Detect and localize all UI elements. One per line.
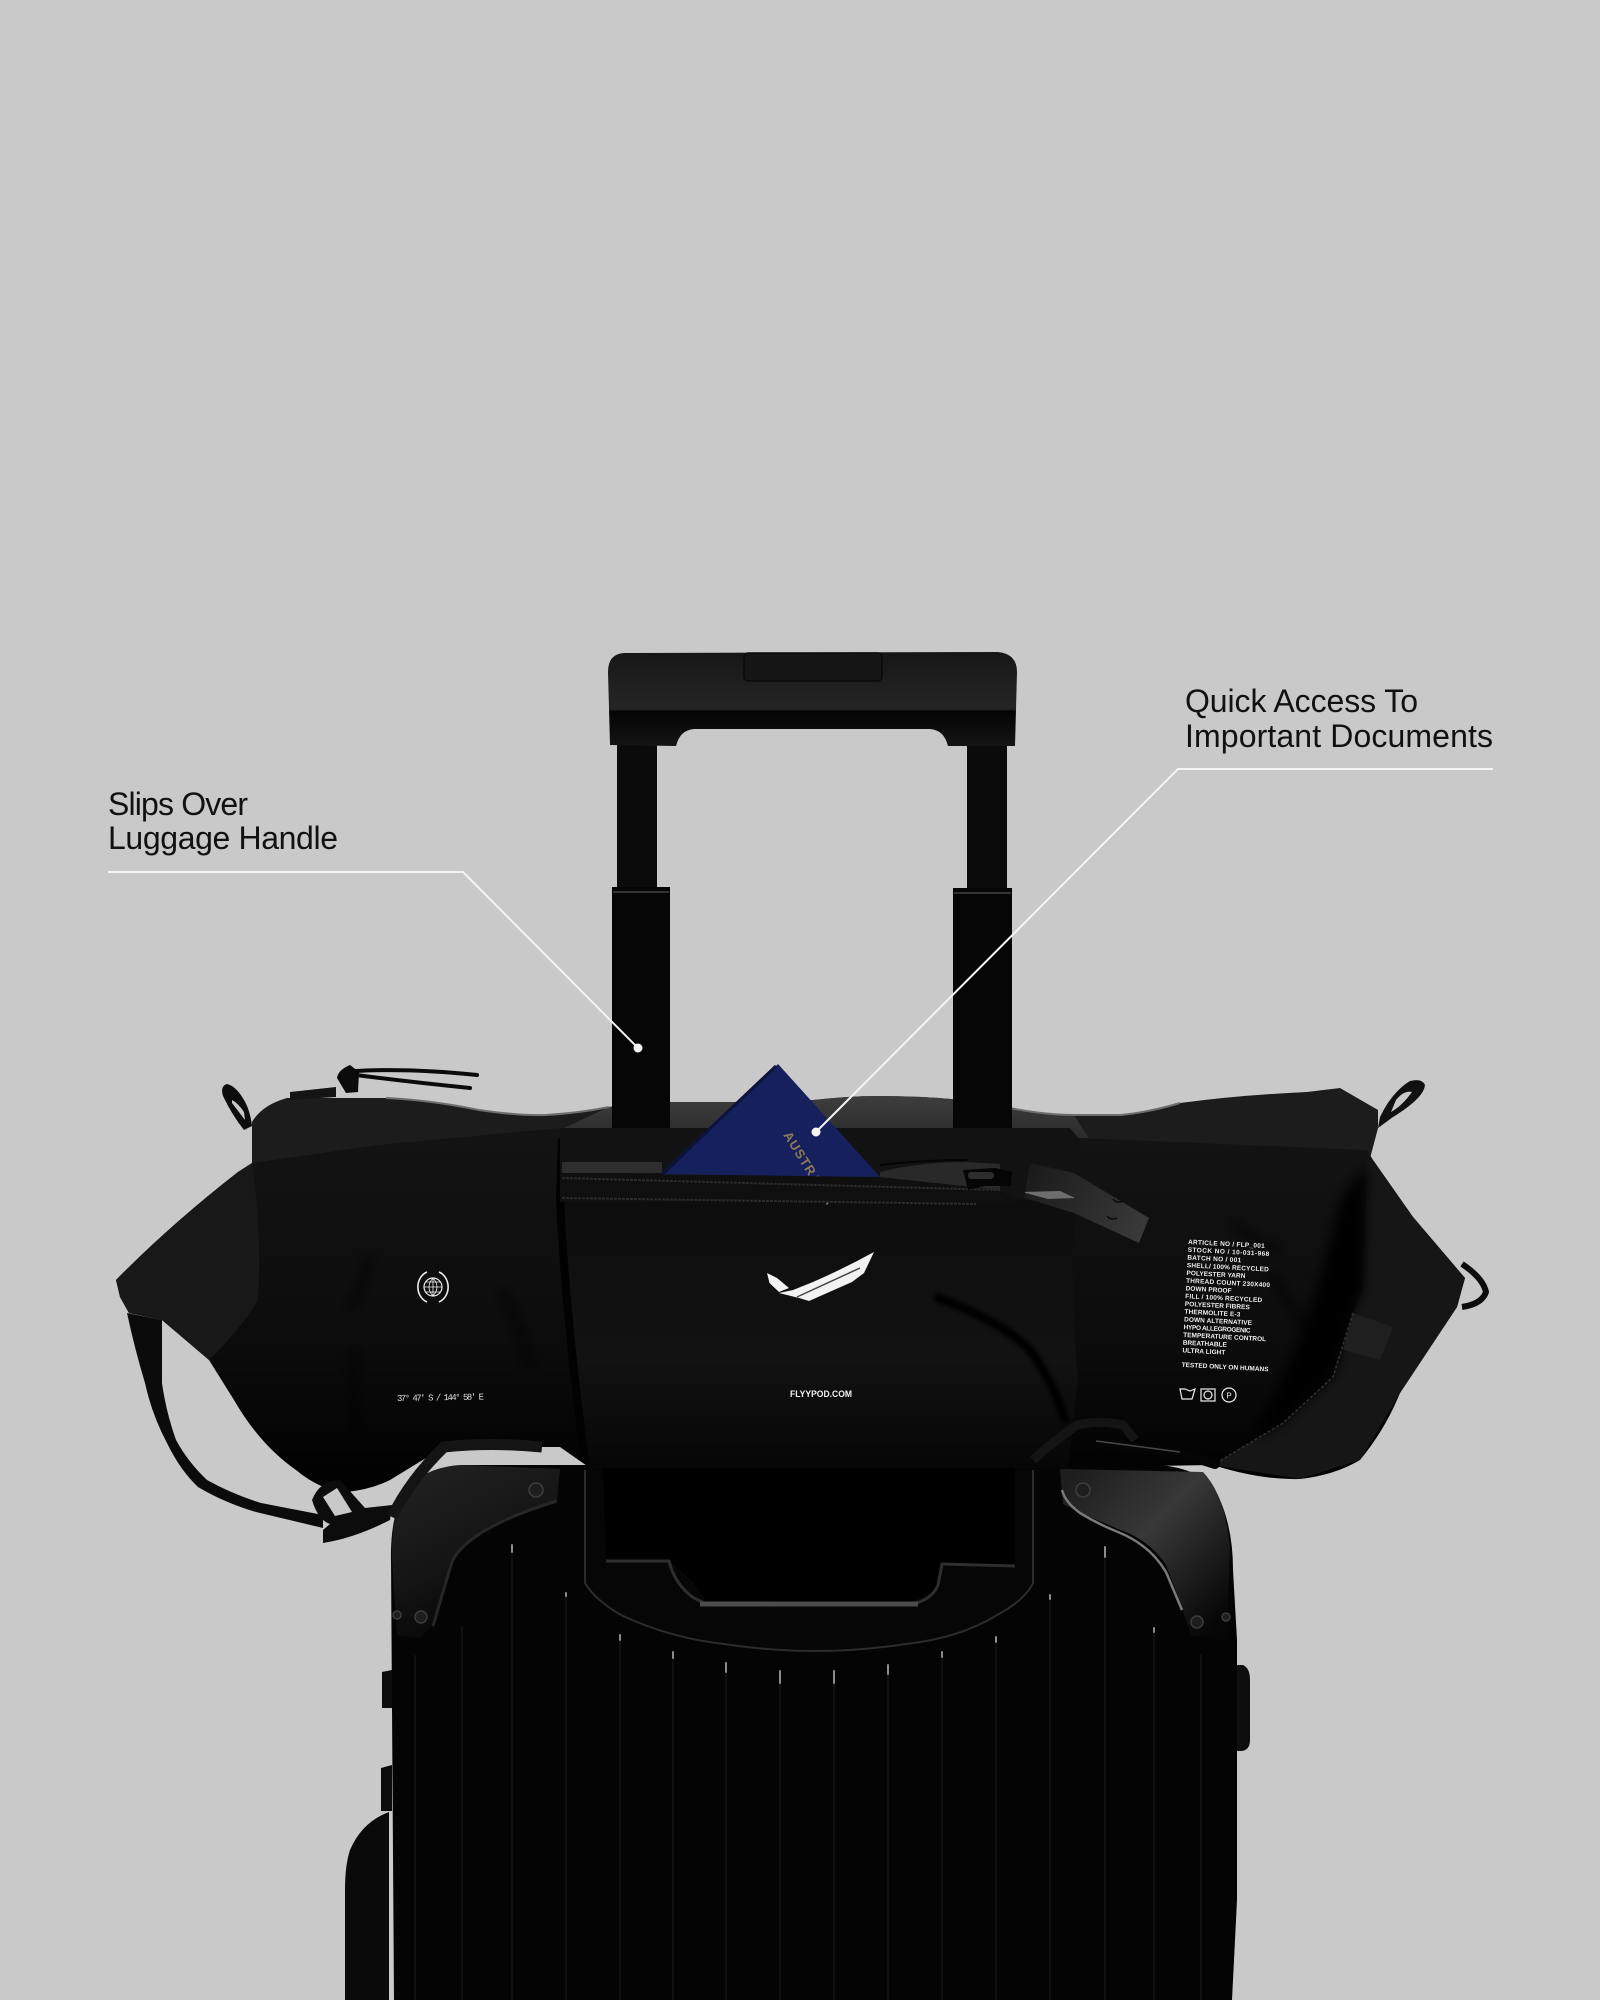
right wing panel xyxy=(1213,1160,1465,1479)
zipper pull tab xyxy=(1011,1160,1149,1243)
suitcase side handle xyxy=(345,1812,389,2000)
recycling arrows xyxy=(418,1272,448,1302)
leader line xyxy=(108,872,638,1048)
care label text: TEMPERATURE CONTROL xyxy=(1183,1332,1266,1343)
luggage handle xyxy=(608,652,1017,1132)
callout text: Luggage Handle xyxy=(108,820,338,856)
handle housing xyxy=(585,1470,1033,1651)
dryer symbol xyxy=(1201,1389,1215,1401)
wing divider xyxy=(797,1268,860,1297)
left corner cap xyxy=(392,1465,560,1638)
right zip tape edge xyxy=(880,1160,967,1165)
care label text: HYPO ALLEGROGENIC xyxy=(1183,1324,1251,1335)
top edge highlight xyxy=(386,1098,1180,1115)
icon: recycled globe xyxy=(418,1272,448,1302)
right inner shadow xyxy=(1250,1165,1367,1440)
suitcase xyxy=(345,1465,1250,2000)
care label text: FILL / 100% RECYCLED xyxy=(1185,1293,1263,1304)
cords xyxy=(356,1070,477,1088)
recess handle strip xyxy=(700,1602,918,1606)
housing recess xyxy=(603,1465,1015,1602)
passport spine xyxy=(662,1066,776,1174)
globe meridians xyxy=(424,1278,442,1296)
bag rear layer xyxy=(252,1088,1378,1170)
bag main body xyxy=(116,1128,1465,1492)
zipper knot xyxy=(337,1065,359,1093)
care label text xyxy=(1181,1239,1276,1373)
dryer ring xyxy=(1204,1391,1212,1399)
right seam stitching xyxy=(1213,1313,1353,1465)
care label text: DOWN ALTERNATIVE xyxy=(1184,1316,1253,1327)
care label text: TESTED ONLY ON HUMANS xyxy=(1181,1362,1269,1373)
care label text: POLYESTER FIBRES xyxy=(1185,1301,1251,1311)
grey centre panel xyxy=(560,1096,1090,1140)
top zipper pull xyxy=(290,1065,477,1100)
logo: wings xyxy=(767,1252,874,1301)
care label text: BATCH NO / 001 xyxy=(1187,1254,1242,1264)
letter P: P xyxy=(1226,1392,1232,1400)
care label text: BREATHABLE xyxy=(1183,1340,1228,1349)
coordinates: 37° 47′ S / 144° 58′ E xyxy=(397,1392,484,1404)
zipper seams xyxy=(562,1178,1000,1204)
strap buckle loop xyxy=(312,1480,392,1543)
grip button xyxy=(744,653,882,681)
buckle gap xyxy=(323,1488,352,1516)
care label text: POLYESTER YARN xyxy=(1186,1270,1246,1280)
grip xyxy=(608,652,1017,746)
callout text: Important Documents xyxy=(1185,718,1493,754)
webbing across suitcase xyxy=(392,1444,542,1517)
suitcase shell xyxy=(391,1465,1237,2000)
callout: quick access to important documents xyxy=(812,683,1493,1136)
rivets xyxy=(393,1483,1230,1628)
pull loop xyxy=(1011,1160,1030,1198)
care label text: DOWN PROOF xyxy=(1185,1285,1232,1295)
care label text: ARTICLE NO / FLP_001 xyxy=(1188,1239,1265,1250)
care label text: ULTRA LIGHT xyxy=(1182,1347,1226,1357)
right corner cap xyxy=(1060,1469,1230,1640)
pull tab grey lining xyxy=(1022,1191,1075,1199)
care label text: THREAD COUNT 230X400 xyxy=(1186,1278,1270,1289)
pocket fold curve xyxy=(935,1297,1066,1423)
callout: slips over luggage handle xyxy=(108,786,642,1052)
front pocket xyxy=(564,1198,1078,1468)
tube collars xyxy=(613,892,1011,893)
recess rim xyxy=(606,1561,1015,1604)
left wing panel xyxy=(116,1163,259,1360)
pocket dark seam xyxy=(560,1138,585,1460)
carabiner bar xyxy=(1093,1442,1215,1464)
pocket lower band xyxy=(560,1160,1149,1423)
care label text: SHELL/ 100% RECYCLED xyxy=(1187,1262,1269,1274)
pocket lip xyxy=(560,1128,1080,1200)
side clasps xyxy=(381,1670,392,1811)
right carabiner strap xyxy=(1033,1422,1215,1464)
icons: care symbols xyxy=(1180,1388,1236,1402)
callout text: Quick Access To xyxy=(1185,683,1418,719)
left cap edge xyxy=(433,1501,557,1626)
passport title: AUSTRALIA xyxy=(780,1129,838,1208)
logo url: FLYYPOD.COM xyxy=(790,1389,852,1400)
care label text: STOCK NO / 10-031-968 xyxy=(1187,1247,1270,1258)
left shoulder strap xyxy=(127,1313,542,1543)
right D ring xyxy=(1462,1264,1486,1307)
left zip tape xyxy=(562,1162,662,1173)
dry clean symbol xyxy=(1222,1388,1236,1402)
fabric folds xyxy=(350,1220,1310,1440)
leader dot xyxy=(634,1044,642,1052)
callout text: Slips Over xyxy=(108,786,248,822)
zipper slider xyxy=(963,1168,1012,1190)
zipper slider highlight xyxy=(968,1172,994,1179)
leader line xyxy=(816,769,1493,1132)
right zip tape xyxy=(880,1162,1000,1190)
pull tab marks xyxy=(1107,1199,1123,1219)
upper tubes xyxy=(617,744,657,890)
care label text: THERMOLITE E-3 xyxy=(1184,1309,1241,1319)
right end loop xyxy=(1378,1080,1425,1128)
carabiner highlight xyxy=(1096,1441,1180,1452)
webbing patch xyxy=(1343,1313,1393,1360)
right lock xyxy=(1228,1665,1250,1751)
vertical ribs xyxy=(415,1547,1201,2000)
leader dot xyxy=(812,1128,820,1136)
left end loop xyxy=(222,1084,252,1130)
passport xyxy=(662,1064,880,1208)
rib highlights xyxy=(512,1545,1154,1683)
left wing xyxy=(767,1273,789,1292)
right cap edge highlight xyxy=(1062,1490,1182,1610)
lower tubes xyxy=(612,887,1012,1132)
